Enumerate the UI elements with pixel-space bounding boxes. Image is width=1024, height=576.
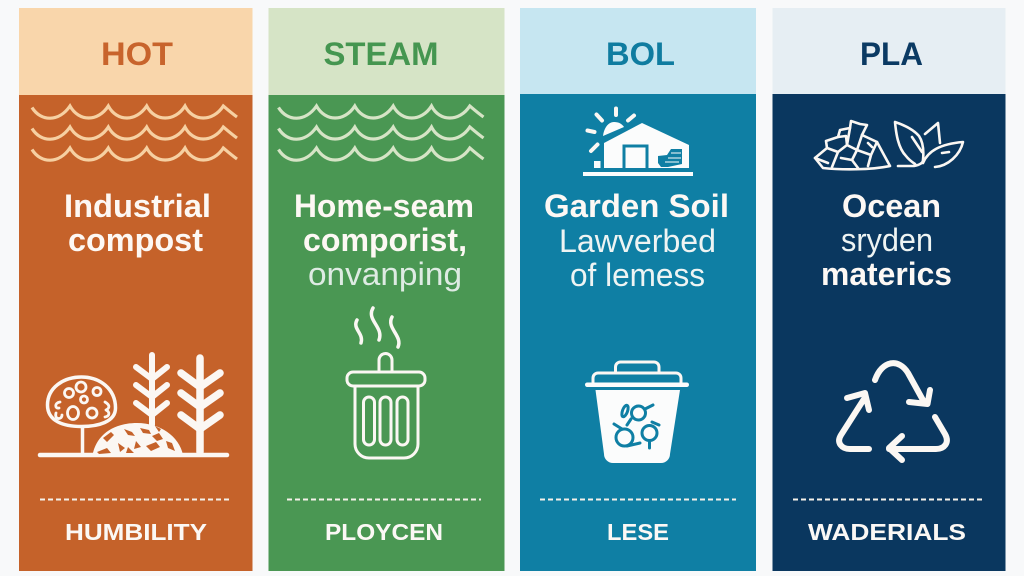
text: Ocean sryden materics: materics bbox=[821, 256, 952, 292]
label: PLOYCEN: PLOYCEN bbox=[325, 519, 443, 545]
label: LESE: LESE bbox=[607, 519, 669, 545]
heading: BOL: BOL bbox=[606, 36, 675, 72]
text: Garden Soil Lawverbed of lemess: Lawverbed bbox=[559, 223, 716, 259]
panel: STEAM bbox=[268, 8, 504, 571]
panel: PLA bbox=[772, 8, 1006, 571]
text: Garden Soil Lawverbed of lemess: Garden Soil bbox=[544, 188, 729, 224]
icon: house with sun bbox=[583, 108, 693, 174]
icon: material pile and leaves bbox=[815, 121, 963, 169]
icon: recycling bin bbox=[585, 362, 689, 463]
heading: STEAM: STEAM bbox=[324, 36, 438, 72]
icon: trees and soil mound bbox=[40, 355, 227, 455]
heading: HOT: HOT bbox=[101, 36, 173, 72]
text: Home-seam comporist, onvanping: onvanping bbox=[308, 256, 462, 292]
icon: waves bbox=[32, 106, 237, 160]
text: Industrial compost: compost bbox=[68, 222, 203, 258]
label: HUMBILITY: HUMBILITY bbox=[65, 519, 207, 545]
text: Ocean sryden materics: Ocean bbox=[842, 188, 941, 224]
icon: steaming bin bbox=[347, 308, 425, 458]
text: Garden Soil Lawverbed of lemess bbox=[544, 188, 729, 293]
divider line bbox=[793, 498, 984, 500]
text: Ocean sryden materics bbox=[821, 188, 952, 292]
panel: HOT bbox=[19, 8, 252, 571]
icon: waves bbox=[278, 106, 484, 160]
divider line bbox=[540, 498, 736, 500]
text: Home-seam comporist, onvanping bbox=[294, 188, 474, 292]
text: Home-seam comporist, onvanping: comporist, bbox=[303, 222, 467, 258]
label: WADERIALS: WADERIALS bbox=[808, 519, 966, 545]
icon: recycling arrows bbox=[839, 363, 947, 460]
panel: BOL bbox=[520, 8, 756, 571]
heading: PLA: PLA bbox=[860, 36, 923, 72]
text: Industrial compost: Industrial bbox=[64, 188, 211, 224]
text: Home-seam comporist, onvanping: Home-seam bbox=[294, 188, 474, 224]
text: Industrial compost bbox=[64, 188, 211, 258]
divider line bbox=[287, 498, 481, 500]
text: Ocean sryden materics: sryden bbox=[841, 222, 933, 258]
text: Garden Soil Lawverbed of lemess: of lemess bbox=[570, 257, 705, 293]
divider line bbox=[40, 498, 231, 500]
